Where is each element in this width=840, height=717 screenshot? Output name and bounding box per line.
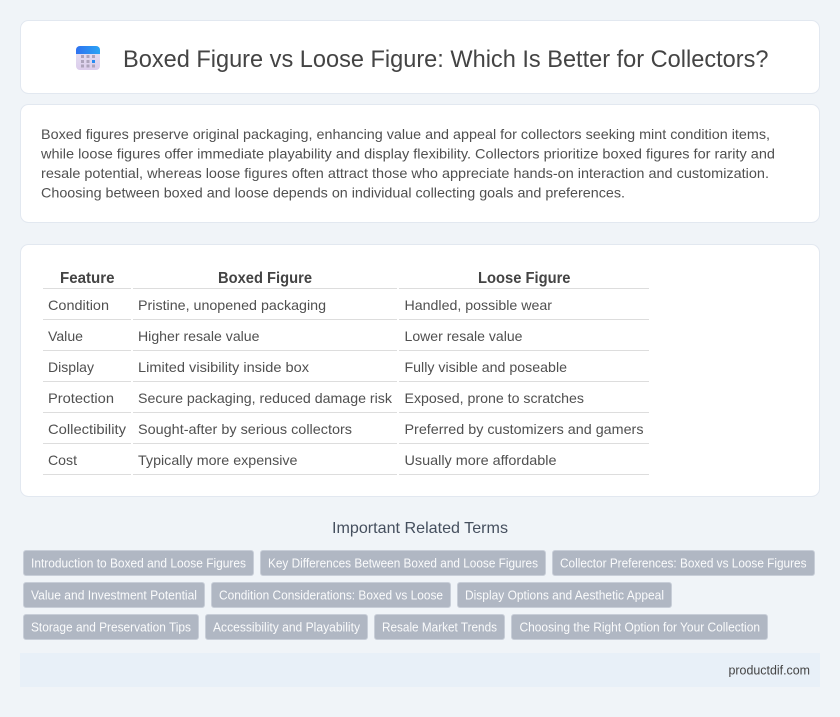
- table row: condition: Handled, possible wear: [404, 297, 552, 313]
- chip: Collector Preferences: Boxed vs Loose Figures: [560, 556, 807, 570]
- chip: [24, 550, 254, 576]
- table row: collectibility: Preferred by customizers and gamers: [404, 421, 644, 437]
- table header row: Feature: [60, 270, 115, 287]
- chip: Value and Investment Potential: [31, 588, 197, 602]
- panel: header: [20, 20, 820, 94]
- chip: [24, 582, 204, 608]
- table row: value: [48, 328, 523, 344]
- chip: Introduction to Boxed and Loose Figures: [31, 556, 246, 570]
- text block: summary: [40, 126, 775, 200]
- text block: summary: resale potential, whereas loose figures often attract those who appreciate hands-on interaction and customization.: [41, 165, 769, 181]
- chip: Condition Considerations: Boxed vs Loose: [219, 588, 443, 602]
- text block: summary: Choosing between boxed and loose depends on individual collecting goals and preferences.: [41, 184, 625, 200]
- table row: value: Higher resale value: [138, 328, 260, 344]
- table row: protection: Secure packaging, reduced damage risk: [138, 390, 393, 406]
- heading: important related terms: Important Related Terms: [332, 520, 508, 537]
- panel: summary paragraph: [20, 104, 820, 222]
- table row: display: Fully visible and poseable: [404, 359, 567, 375]
- chip: Key Differences Between Boxed and Loose Figures: [268, 556, 538, 570]
- panel: related term chips: [24, 550, 814, 640]
- chip: [552, 550, 814, 576]
- table header row: Boxed Figure: [218, 270, 312, 287]
- table row: collectibility: Sought-after by serious collectors: [138, 421, 352, 437]
- footer: site name: productdif.com: [728, 662, 810, 678]
- table row: cost: [48, 452, 557, 468]
- table row: protection: [48, 390, 584, 406]
- chip: Choosing the Right Option for Your Collection: [520, 620, 760, 634]
- table row: condition: [48, 297, 552, 313]
- chip: Resale Market Trends: [382, 620, 497, 634]
- table header row: Loose Figure: [478, 270, 571, 287]
- chip: [512, 614, 768, 640]
- table row: display: Display: [48, 359, 94, 375]
- panel: comparison table: [20, 244, 820, 496]
- table row: condition: Condition: [48, 297, 109, 313]
- chip: [260, 550, 546, 576]
- chip: [458, 582, 672, 608]
- table row: collectibility: Collectibility: [48, 421, 126, 437]
- table row: condition: Pristine, unopened packaging: [138, 297, 326, 313]
- chip: [24, 614, 198, 640]
- chip: Storage and Preservation Tips: [31, 620, 191, 634]
- footer: [20, 653, 820, 687]
- table row: value: Lower resale value: [404, 328, 523, 344]
- table row: cost: Cost: [48, 452, 77, 468]
- chip: Display Options and Aesthetic Appeal: [465, 588, 664, 602]
- table row: protection: Protection: [48, 390, 114, 406]
- chip: [374, 614, 504, 640]
- table row: value: Value: [48, 328, 83, 344]
- icon: calendar: [76, 46, 100, 70]
- table row: cost: Usually more affordable: [404, 452, 557, 468]
- chip: [212, 582, 450, 608]
- table row: protection: Exposed, prone to scratches: [404, 390, 584, 406]
- table row: display: [48, 359, 567, 375]
- table header row: [60, 270, 571, 287]
- text block: summary: Boxed figures preserve original packaging, enhancing value and appeal for collectors seeking mint condition items,: [41, 126, 770, 142]
- table row: collectibility: [48, 421, 644, 437]
- chip: Accessibility and Playability: [213, 620, 360, 634]
- table row: cost: Typically more expensive: [138, 452, 298, 468]
- text block: summary: while loose figures offer immediate playability and display flexibility. Collectors prioritize boxed figures for rarity and: [40, 146, 775, 162]
- title: Boxed Figure vs Loose Figure: Which Is Better for Collectors?: [123, 46, 768, 73]
- chip: [206, 614, 368, 640]
- table row: display: Limited visibility inside box: [138, 359, 309, 375]
